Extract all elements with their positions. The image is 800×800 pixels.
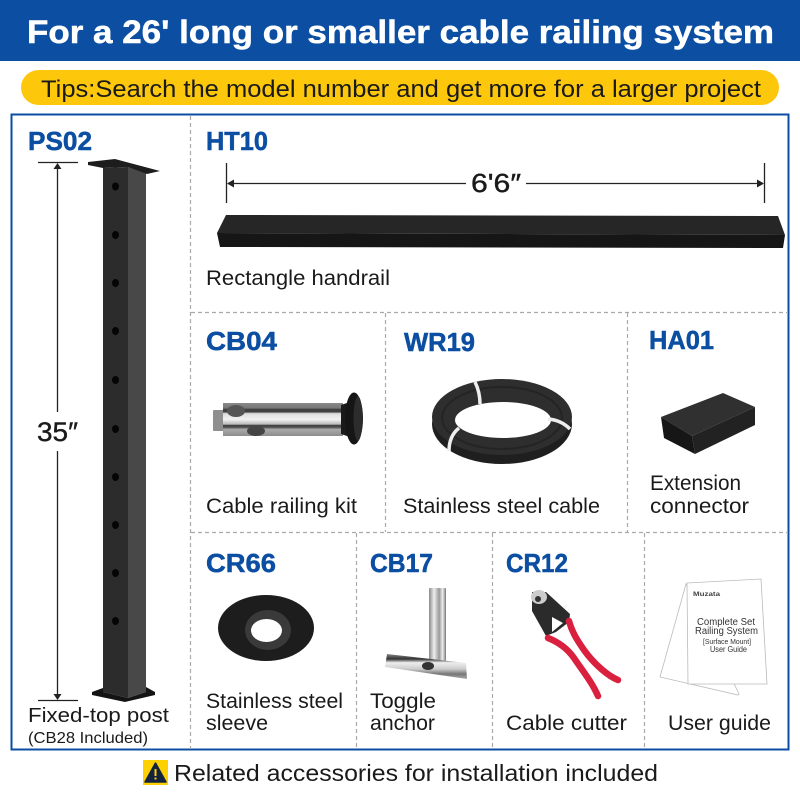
label: fixed-top post: Fixed-top post — [28, 704, 169, 727]
label: fixed-top post — [28, 704, 169, 747]
dimension: 35 inch — [37, 162, 78, 700]
label: fixed-top post: (CB28 Included) — [28, 730, 148, 747]
header banner — [0, 0, 800, 61]
icon: warning — [143, 760, 168, 785]
panel: HT10 handrail — [206, 126, 785, 290]
image: user guide booklet: [Surface Mount] — [703, 637, 751, 646]
label: toggle anchor — [370, 689, 436, 735]
image: user guide booklet: User Guide — [710, 645, 747, 654]
image: user guide booklet: Complete Set — [697, 617, 755, 628]
panel: user guide — [660, 579, 771, 735]
label: rectangle handrail: Rectangle handrail — [206, 266, 390, 290]
heading: WR19: WR19 — [404, 327, 475, 357]
panel: CB17 — [370, 548, 467, 735]
heading: PS02: PS02 — [28, 126, 92, 156]
label: toggle anchor: Toggle — [370, 689, 436, 713]
label: stainless steel sleeve: sleeve — [206, 711, 268, 735]
header banner: For a 26' long or smaller cable railing system — [27, 14, 774, 50]
outer panel frame — [12, 114, 788, 750]
image: user guide booklet: Muzata — [693, 591, 720, 598]
panel: PS02 post — [28, 126, 169, 747]
label: toggle anchor: anchor — [370, 711, 435, 735]
image: sleeve washer — [218, 595, 314, 661]
label: user guide: User guide — [668, 711, 771, 735]
heading: HT10: HT10 — [206, 126, 268, 156]
label: stainless steel cable: Stainless steel cable — [403, 494, 600, 518]
panel: CR12 — [506, 548, 627, 735]
panel: WR19 — [403, 327, 600, 518]
label: extension connector: Extension — [650, 471, 741, 495]
image: cable coil — [432, 379, 572, 464]
image: cable railing kit — [213, 392, 363, 444]
footer note: Related accessories for installation included — [174, 760, 658, 786]
image: user guide booklet: Railing System — [695, 626, 758, 637]
dimension: 6'6" — [226, 163, 764, 203]
image: post — [88, 159, 160, 702]
dimension: 6'6": 6'6″ — [471, 168, 521, 198]
image: cable cutter — [531, 590, 618, 696]
image: user guide booklet — [660, 579, 767, 695]
heading: CB17: CB17 — [370, 548, 433, 578]
heading: CR66: CR66 — [206, 548, 276, 578]
label: extension connector: connector — [650, 494, 749, 518]
image: handrail — [217, 215, 785, 248]
label: extension connector — [650, 471, 749, 518]
heading: HA01: HA01 — [649, 325, 714, 355]
panel: HA01 — [649, 325, 755, 518]
heading: CB04: CB04 — [206, 326, 278, 356]
panel: CB04 — [206, 326, 363, 518]
label: cable cutter: Cable cutter — [506, 711, 627, 735]
label: stainless steel sleeve: Stainless steel — [206, 689, 343, 713]
image: extension connector box — [661, 393, 755, 454]
image: toggle anchor — [385, 588, 467, 679]
tips pill: Tips:Search the model number and get more for a larger project — [41, 76, 761, 103]
panel: CR66 — [206, 548, 343, 735]
dimension: 35 inch: 35″ — [37, 417, 78, 447]
label: stainless steel sleeve — [206, 689, 343, 735]
label: cable railing kit: Cable railing kit — [206, 494, 357, 518]
heading: CR12: CR12 — [506, 548, 568, 578]
